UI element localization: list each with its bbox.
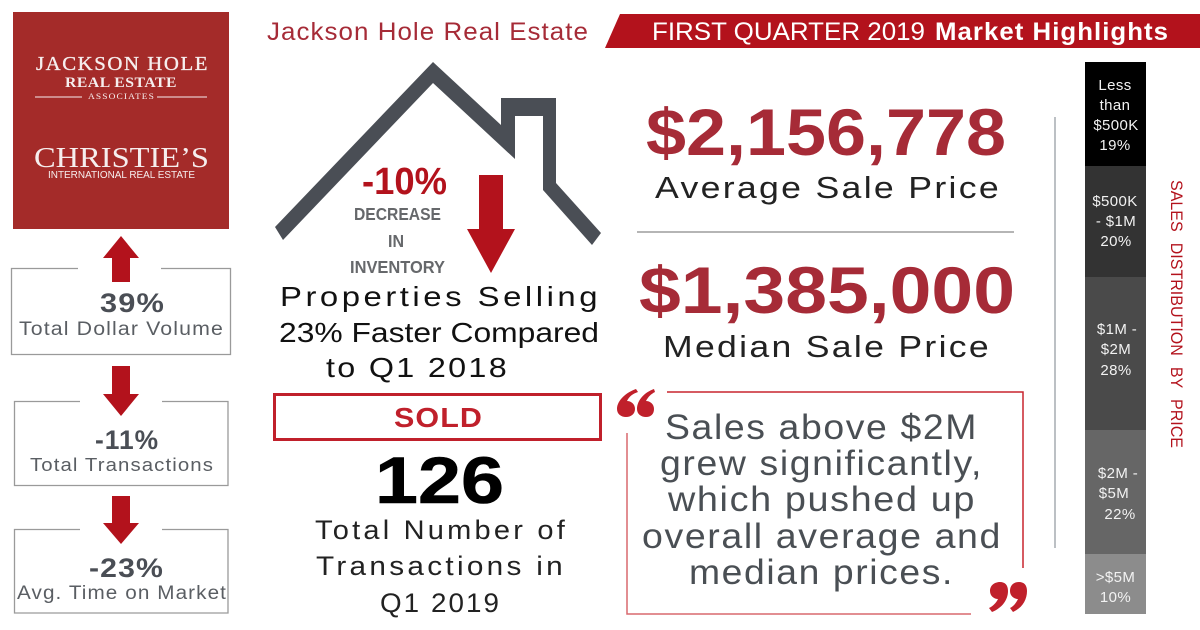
chart title: sales distribution by price: SALES DISTRIBUTION BY PRICE [1167,180,1186,448]
logo: Jackson Hole Real Estate Associates: ASSOCIATES [88,91,155,101]
stat: total dollar volume: Total Dollar Volume [19,319,224,340]
inventory callout: INVENTORY [350,257,445,277]
average sale price: Average Sale Price [655,170,1001,205]
segment: $500K to $1M: 20% [1100,233,1132,250]
segment: $2M to $5M: 22% [1104,506,1136,523]
icon: large down arrow [467,175,515,273]
segment: $1M to $2M [1085,277,1146,430]
properties selling text: to Q1 2018 [326,352,509,383]
banner: FIRST QUARTER 2019 [652,18,925,46]
segment: $1M to $2M: $2M [1101,341,1131,358]
stat: average time on market: -23% [89,553,164,583]
icon: house outline [275,62,601,245]
properties selling text [279,281,601,383]
segment: over $5M [1085,554,1146,614]
total transactions caption: Transactions in [316,551,566,581]
segment: $500K to $1M: $500K [1092,193,1138,210]
median sale price: $1,385,000 [639,253,1015,327]
properties selling text: 23% Faster Compared [279,317,599,348]
stat: average time on market [14,496,228,613]
stat: total transactions: -11% [95,425,159,455]
total transactions caption [315,515,568,618]
segment: $2M to $5M: $2M - [1098,465,1138,482]
segment: less than $500K: than [1100,97,1130,114]
segment: less than $500K [1085,62,1146,166]
total transactions caption: Q1 2019 [380,588,501,618]
average sale price [646,95,1006,205]
median sale price: Median Sale Price [663,329,991,364]
total transactions number: 126 [375,443,504,517]
quote text: Sales above $2M [665,408,978,447]
logo: Jackson Hole Real Estate Associates: JACKSON HOLE [36,53,209,75]
segment: less than $500K: $500K [1093,117,1139,134]
segment: less than $500K: 19% [1099,137,1131,154]
quote text [642,408,1002,592]
stat: average time on market: Avg. Time on Market [17,583,227,604]
segment: $2M to $5M: $5M [1099,485,1129,502]
segment: over $5M: >$5M [1096,569,1135,586]
quote text: overall average and [642,517,1002,556]
quote text: median prices. [689,553,954,592]
banner [605,14,1200,48]
inventory callout: DECREASE [354,204,441,224]
segment: $500K to $1M: - $1M [1096,213,1136,230]
median sale price [639,253,1015,364]
quote text: which pushed up [667,480,976,519]
segment: $1M to $2M: $1M - [1097,321,1137,338]
inventory callout: -10% [362,161,447,203]
logo: Christie's International Real Estate: INTERNATIONAL REAL ESTATE [48,169,195,181]
stat: total transactions [14,366,228,486]
logo: Christie's International Real Estate: CHRISTIE’S [34,143,209,174]
total transactions caption: Total Number of [315,515,568,545]
banner: Market Highlights [935,18,1169,46]
segment: $1M to $2M: 28% [1100,362,1132,379]
stat: total dollar volume: 39% [100,288,165,318]
sold box [274,394,600,440]
chart: sales distribution by price [1085,62,1146,614]
segment: $2M to $5M [1085,430,1146,554]
icon: opening quote [617,389,655,417]
stat: total dollar volume [12,236,230,354]
brand heading: Jackson Hole Real Estate [267,18,589,46]
segment: over $5M: 10% [1100,589,1131,606]
quote panel [617,389,1027,614]
sold box: SOLD [394,402,483,433]
icon: closing quote [989,582,1027,612]
quote text: grew significantly, [660,444,983,483]
icon: down arrow [103,366,139,416]
logo: Jackson Hole Real Estate Associates [35,53,209,101]
icon: up arrow [103,236,139,282]
inventory callout: IN [388,231,404,251]
inventory callout [350,161,447,277]
segment: $500K to $1M [1085,166,1146,277]
average sale price: $2,156,778 [646,95,1006,169]
segment: less than $500K: Less [1098,77,1132,94]
properties selling text: Properties Selling [280,281,601,312]
logo: Jackson Hole Real Estate Associates: REAL ESTATE [65,75,177,91]
logo panel [13,12,229,229]
icon: down arrow [103,496,139,544]
stat: total transactions: Total Transactions [30,454,214,475]
